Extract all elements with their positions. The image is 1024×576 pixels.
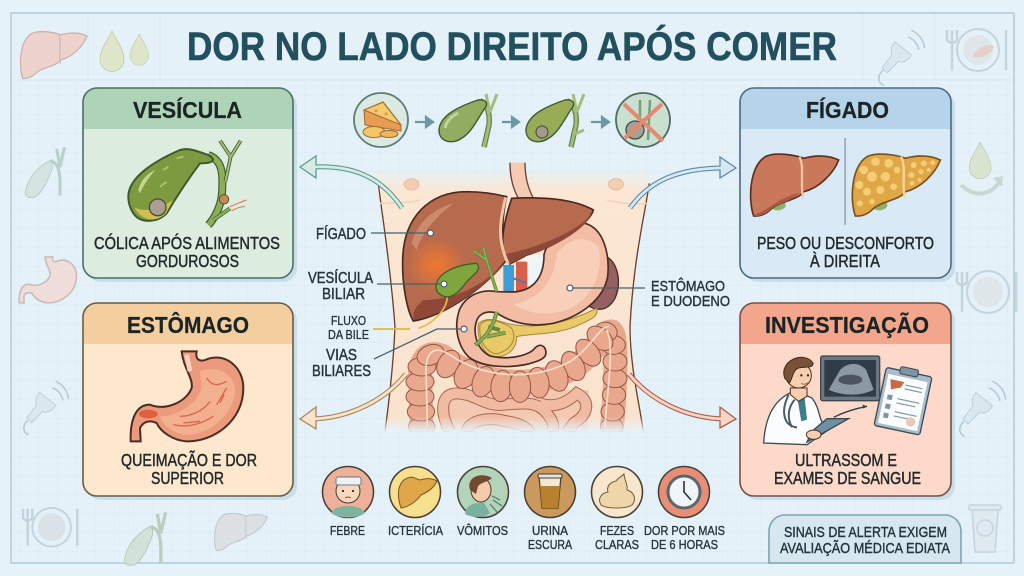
label: estômago e duodeno [567,278,730,310]
symptom: febre [322,466,374,538]
caption: fígado [757,233,934,271]
symptom: fezes claras: CLARAS [595,537,639,552]
symptom: urina escura: ESCURA [528,537,572,552]
symptom: dor por mais de 6 horas [644,466,725,552]
symptom: dor por mais de 6 horas: DOR POR MAIS [644,523,725,538]
label: estômago e duodeno: ESTÔMAGO [651,278,725,295]
caption: estômago: QUEIMAÇÃO E DOR [121,449,257,470]
arrow [591,117,609,127]
skin bottom fade [373,417,650,432]
pancreas [478,308,597,357]
label: fluxo da bile: DA BILE [328,327,369,342]
heading: estômago: ESTÔMAGO [127,311,249,338]
spleen [590,257,618,309]
icon: fatty food [354,93,408,147]
label: vesícula biliar: BILIAR [322,286,365,303]
ghost icon: plate top right [947,29,1006,71]
ghost icon: liver bottom [215,513,267,551]
panel: investigação [740,303,955,500]
caption: vesícula: CÓLICA APÓS ALIMENTOS [94,232,280,253]
ghost icon: sample cup right [969,505,1001,552]
icon: gallbladder [439,94,497,147]
label: fígado: FÍGADO [316,224,366,243]
symptom: dor por mais de 6 horas: DE 6 HORAS [651,537,718,552]
arrow [415,117,433,127]
pancreas head overlap [480,320,514,354]
bile flow line [418,297,447,328]
divider between livers [844,138,846,225]
stomach and duodenum [457,223,608,367]
label: vesícula biliar: VESÍCULA [308,268,373,287]
colon [406,320,627,436]
panel: fígado [740,88,955,282]
arrow: to vesícula [300,156,402,208]
callout: alert: SINAIS DE ALERTA EXIGEM [784,524,947,541]
label: vias biliares: VIAS [326,347,357,364]
symptom: febre: FEBRE [330,523,365,538]
ghost icon: ultrasound probe right [960,381,1006,436]
caption: vesícula: GORDUROSOS [136,251,239,271]
ghost icon: bile drops [100,31,149,72]
caption: vesícula [94,232,280,271]
icon: fatty liver [852,154,940,216]
heading: vesícula: VESÍCULA [133,96,242,123]
panel: vesícula [83,88,297,282]
caption: investigação: ULTRASSOM E [795,450,897,470]
arrow [502,117,519,127]
label: vias biliares [312,326,467,380]
ghost icon: plate right [957,271,1016,313]
ghost icon: liver top left [20,32,87,78]
symptom: urina escura [524,466,576,552]
symptom: icterícia [388,466,443,538]
caption: investigação [774,450,921,488]
ghost icon: stomach left [19,257,77,303]
symptom: urina escura: URINA [532,523,568,538]
icon: blocked duct [616,93,670,147]
icon: doctor with ultrasound and report [764,356,933,445]
gap behind organs [525,255,544,285]
arrow: to investigação [629,374,736,428]
caption: fígado: À DIREITA [810,251,880,271]
caption: estômago: SUPERIOR [151,468,224,488]
liver [403,192,593,321]
esophagus [510,163,533,198]
symptom: vômitos: VÔMITOS [457,523,508,538]
heading: investigação: INVESTIGAÇÃO [765,311,929,338]
ghost icon: ultrasound probe top right [879,30,925,85]
ghost icon: gallbladder bottom [125,512,166,565]
ghost icon: drop and cycle arrow right [961,142,1003,194]
symptom: fezes claras [592,466,642,552]
label: fluxo da bile [328,313,410,342]
central anatomy illustration [373,163,653,436]
label: vesícula biliar [308,268,447,303]
symptom: fezes claras: FEZES [600,523,634,538]
arrow: to fígado [630,157,736,208]
ghost icon: gallbladder left [26,147,65,198]
flow: fatty meal to blocked gallbladder [354,93,670,147]
colon band [426,327,610,427]
symptom: icterícia: ICTERÍCIA [388,523,443,538]
vessels [503,262,527,292]
gallbladder and ducts [436,247,506,345]
caption: fígado: PESO OU DESCONFORTO [757,233,934,253]
label: fígado [316,224,434,243]
callout: alert [769,515,961,563]
label: estômago e duodeno: E DUODENO [651,293,730,310]
callout: alert: AVALIAÇÃO MÉDICA EDIATA [780,540,950,557]
torso [375,168,653,432]
title: DOR NO LADO DIREITO APÓS COMER [187,23,837,69]
symptom: vômitos [457,466,508,538]
icon: stomach [131,351,243,441]
ghost icon: ultrasound probe left [24,381,68,435]
caption: estômago [121,449,257,488]
panel: estômago [83,303,297,500]
icon: healthy liver [751,154,839,216]
label: vias biliares: BILIARES [312,363,371,380]
caption: investigação: EXAMES DE SANGUE [774,468,921,488]
ghost icon: plate bottom left [23,508,77,547]
label: fluxo da bile: FLUXO [331,313,366,328]
small intestine [443,390,588,433]
icon: gallbladder with stone [526,94,584,147]
heading: fígado: FÍGADO [806,96,889,123]
icon: gallbladder with stones [128,141,247,225]
arrow: to estômago [300,374,406,429]
